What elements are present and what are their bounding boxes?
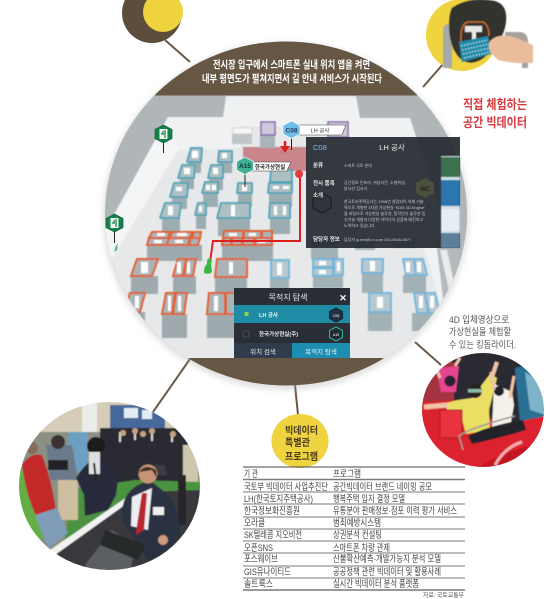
connector lines — [153, 40, 444, 415]
panel: destination search: ✕ — [339, 293, 347, 303]
watermark hexagons: WC — [420, 187, 431, 193]
option: A15: 한국가상현실(주) — [259, 330, 298, 338]
callout: big data special pavilion: 빅데이터 — [285, 424, 318, 437]
panel thumbnails — [441, 156, 460, 248]
panel: booth info C08: 력으로 개발한 3차원 가상현실 'KDM 3D Engine' — [344, 204, 425, 210]
marker: C08 — [283, 121, 346, 150]
panel: booth info C08: 방사선 검사기 — [344, 185, 368, 191]
marker: C08: C08 — [286, 128, 298, 134]
panel: destination search — [234, 288, 350, 358]
table: programs — [243, 467, 465, 590]
photo: VIP in simulator at exhibition — [15, 400, 205, 575]
panel: booth info C08: 신기술 개발과 다양한 아이디어 상품에 매진하고 — [344, 216, 423, 222]
booths: teal — [160, 148, 292, 236]
table: programs: 산불확산예측·개발가능지 분석 모델 — [333, 553, 441, 565]
callout: big data special pavilion — [272, 414, 328, 468]
panel: booth info C08: LH 공사 — [379, 143, 405, 152]
caption: kingdom rider: 4D 입체영상으로 — [449, 314, 509, 326]
heading: map caption: 전시장 입구에서 스마트폰 실내 위치 앱을 켜면 — [213, 58, 370, 71]
panel: booth info C08: 전시 품목 — [313, 179, 335, 187]
callout: big data special pavilion: 프로그램 — [285, 451, 318, 463]
brown header band — [154, 42, 418, 96]
icon: decorative brown and yellow circles — [122, 0, 183, 43]
brown footer band — [188, 358, 384, 386]
table: programs: 실시간 빅데이터 분석 플랫폼 — [333, 579, 419, 590]
panel: booth info C08: 한국토지주택공사는 1998년 설립되어 자체 기술 — [344, 198, 424, 204]
option: LH — [244, 308, 342, 322]
caption: kingdom rider — [449, 314, 516, 351]
panel: destination search: 위치 검색 — [250, 347, 276, 356]
watermark hexagons — [313, 178, 434, 213]
marker: A15: A15 — [239, 163, 251, 170]
callout: big data special pavilion: 특별관 — [285, 436, 310, 449]
table: programs: 기 관 — [244, 469, 258, 480]
caption: kingdom rider: 수 있는 킹돔라이더. — [449, 339, 516, 351]
route path — [210, 141, 300, 262]
table: programs: 유통분야 판매정보·점포 이력 평가 서비스 — [333, 505, 457, 517]
panel: booth info C08: 스마트 국토 분야 — [344, 162, 372, 168]
photo: hand holding card on pad — [426, 0, 533, 71]
option: A15: A15 — [333, 333, 339, 337]
panel: booth info C08: 을 바탕으로 가상현실 솔루션, 동작인식 솔루션 등 — [344, 210, 426, 216]
heading: map caption: 내부 평면도가 펼쳐지면서 길 안내 서비스가 시작된다 — [202, 72, 382, 85]
panel: destination search: 목적지 탐색 — [305, 347, 337, 356]
marker: exit left — [106, 214, 123, 252]
table: programs: 공간빅데이터 브랜드 네이밍 공모 — [333, 482, 432, 493]
main circle: exhibition floor map — [101, 40, 470, 392]
option: LH: LH 공사 — [259, 311, 278, 319]
caption: kingdom rider: 가상현실을 체험할 — [449, 327, 511, 338]
table: programs: 상권분석 컨설팅 — [333, 529, 382, 541]
panel: booth info C08: 소개 — [313, 191, 323, 199]
heading: direct experience: 직접 체험하는 — [463, 97, 527, 112]
heading: map caption — [202, 58, 382, 85]
panel: booth info C08: 담당자 정보 — [313, 235, 340, 243]
panel: destination search: 목적지 탐색 — [268, 292, 308, 302]
table: programs: 솔트룩스 — [244, 579, 273, 590]
table: programs: 스마트폰 차량 관제 — [333, 542, 390, 554]
marker: C08: LH 공사 — [311, 126, 329, 134]
panel: booth info C08: C08 — [313, 143, 327, 152]
marker: A15 — [236, 157, 291, 187]
heading: direct experience: 공간 빅데이터 — [463, 115, 527, 130]
option: A15 — [243, 327, 342, 341]
booths: blue — [270, 248, 440, 332]
marker: A15: 한국가상현실 — [255, 163, 285, 171]
room walls and floor — [100, 96, 472, 360]
booths: orange — [124, 231, 273, 338]
panel: booth info C08: 분류 — [313, 161, 323, 169]
heading: direct experience — [463, 97, 527, 130]
panel: booth info C08: 공간정보 인프라, 위성사진, 소형위성, — [344, 179, 406, 185]
table: programs: 행복주택 입지 결정 모델 — [333, 493, 405, 505]
option: LH: C08 — [333, 314, 339, 318]
table: programs: LH(한국토지주택공사) — [244, 494, 313, 505]
panel: booth info C08 — [306, 137, 460, 248]
table: programs: 범죄예방시스템 — [333, 517, 381, 529]
table: programs: 공공정책 관련 빅데이터 및 활용사례 — [333, 566, 441, 578]
table: programs: GIS유나이티드 — [244, 567, 291, 578]
navigation pointers — [204, 146, 303, 274]
booths: back row and highlighted zone — [232, 122, 348, 171]
table: programs: 국토부 빅데이터 사업추진단 — [244, 481, 328, 493]
table: programs: 한국정보화진흥원 — [244, 505, 300, 517]
photo: kingdom rider — [420, 350, 546, 470]
panel: booth info C08: 노력하고 있습니다. — [344, 222, 376, 228]
table: programs: 오라클 — [244, 518, 265, 529]
table: programs: 오픈SNS — [244, 543, 273, 554]
table: programs: 포스웨이브 — [244, 553, 278, 565]
table: programs: SK텔레콤 지오비전 — [244, 529, 302, 541]
marker: exit top — [155, 125, 172, 153]
table: programs: 프로그램 — [333, 468, 361, 480]
panel: booth info C08: 담당자 guest@Lh.com 010-5646-6877 — [344, 236, 412, 242]
source credit: 자료: 국토교통부 — [423, 590, 464, 599]
